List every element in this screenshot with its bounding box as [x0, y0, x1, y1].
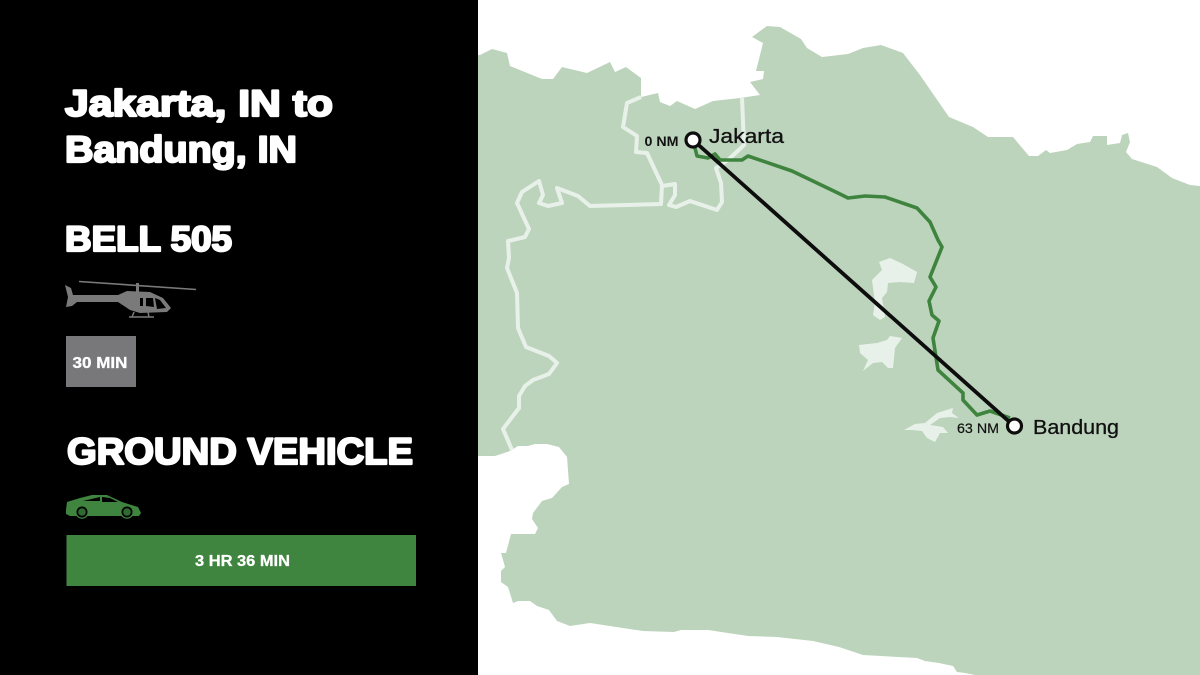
map: province borders [503, 97, 744, 450]
map: helicopter straight line route [693, 140, 1014, 426]
bar: ground vehicle time: 3 HR 36 MIN [195, 553, 290, 570]
marker: Jakarta [686, 133, 700, 147]
title: Bandung, IN [65, 129, 297, 170]
bar: ground vehicle time [66, 535, 416, 586]
icon: helicopter [65, 282, 196, 317]
panel: sidebar [0, 0, 478, 675]
bar: helicopter time: 30 MIN [72, 355, 128, 372]
marker: Bandung [1008, 419, 1022, 433]
title [65, 83, 333, 170]
map: lakes [859, 258, 959, 442]
map: ground vehicle route [695, 148, 1010, 418]
label: Bandung: Bandung [1033, 416, 1119, 439]
label: Jakarta: Jakarta [709, 125, 785, 148]
title: Jakarta, IN to [65, 83, 333, 124]
bar: helicopter time [66, 336, 136, 387]
label: 63 NM: 63 NM [957, 421, 999, 436]
heading: BELL 505: BELL 505 [65, 220, 232, 259]
map: land area [478, 26, 1200, 675]
panel: map [478, 0, 1200, 675]
icon: car [66, 495, 141, 519]
heading: GROUND VEHICLE: GROUND VEHICLE [67, 431, 413, 472]
label: 0 NM: 0 NM [644, 134, 678, 149]
